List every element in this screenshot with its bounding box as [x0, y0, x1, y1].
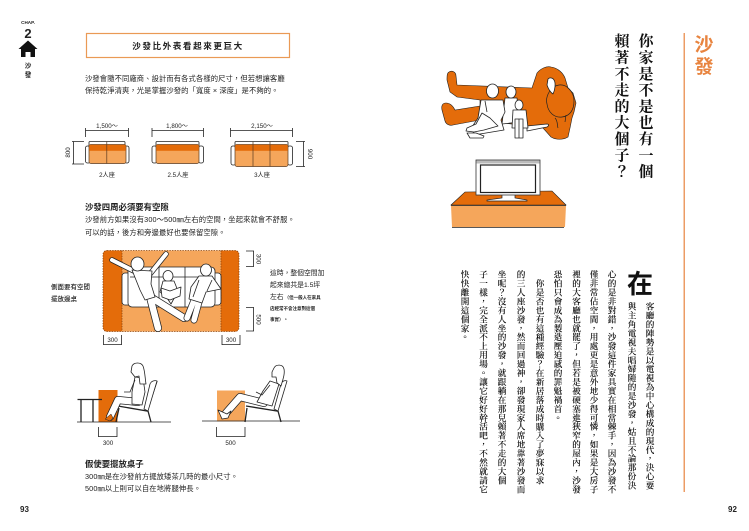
headline [612, 32, 656, 180]
intro text [85, 74, 285, 95]
figure: seated forward [110, 400, 138, 417]
section title: 發 [694, 56, 714, 78]
sofa: 2.5 seats: 1,800～ [166, 123, 188, 130]
dimension: 500 [216, 427, 245, 437]
sofa outline [122, 267, 221, 307]
chapter tab [18, 20, 38, 79]
cushion face [547, 78, 555, 94]
chapter tab: 2 [24, 26, 32, 41]
sofa: 2.5 seats [152, 123, 204, 179]
intro text: 保持乾淨清爽，光是掌握沙發的「寬度 × 深度」是不夠的。 [85, 86, 279, 95]
clearance text: 可以的話，後方和旁邊最好也要保留空隙。 [85, 228, 226, 237]
giant orange figure [442, 67, 576, 139]
dimension: 300 left: 300 [107, 337, 118, 344]
chapter tab: CHAP. [21, 20, 35, 25]
heading box: sofa looks bigger [86, 34, 290, 58]
section title: 沙 [694, 35, 714, 56]
table note: 500㎜以上則可以自在地將腿伸長。 [85, 484, 201, 493]
sofa: 2 seats: 1,500～ [96, 123, 118, 130]
body text: 坐呢？沒有人坐的沙發，就跟躺在那兒賴著不走的大個 [496, 269, 508, 485]
illustration: family on sofa [442, 67, 576, 228]
side table [78, 400, 102, 422]
total area note: 事實）。 [270, 316, 288, 323]
body text: 與主角電視夫唱婦隨的是沙發，姑且不論那份決 [626, 301, 638, 491]
page number 92: 92 [728, 505, 737, 514]
side view: 300 clearance: 300 [103, 440, 114, 447]
table note [85, 459, 238, 493]
sofa: 3 seats: 3人座 [254, 171, 270, 179]
cushion curves [547, 85, 574, 128]
total area note: 這時，整個空間加 [270, 268, 325, 277]
body text: 客廳的陣勢是以電視為中心構成的現代，決心要 [644, 301, 656, 491]
dimension: 800: 800 [65, 147, 72, 158]
total area note: 店經常不會注意到這個 [270, 305, 315, 312]
side table note: 側面要有空間 [51, 282, 90, 291]
body text: 你是否也有這種經驗？在新居落成時購入了夢寐以求 [534, 278, 546, 485]
section title [694, 35, 714, 78]
figure: legs stretched [226, 397, 264, 413]
body text: 僅非常佔空間，用處更是意外地少得可憐，如果是大房子 [588, 269, 600, 494]
figure: child reading [160, 270, 181, 304]
side table note: 擺放邊桌 [51, 294, 78, 303]
dimension: 300 right [222, 335, 240, 345]
chapter tab: 沙 [25, 62, 32, 70]
heading box: sofa looks bigger: 沙發比外表看起來更巨大 [132, 40, 244, 51]
chapter rule [684, 33, 685, 492]
clearance text: 沙發前方如果沒有300～500㎜左右的空間，坐起來就會不舒服。 [85, 215, 295, 224]
side table note [51, 282, 90, 303]
body text: 裡的大客廳也就罷了，但若是被硬塞進狹窄的屋內，沙發 [570, 269, 582, 494]
total area note: 左右（但一般人在家具 [270, 292, 321, 301]
body text: 的三人座沙發，然而回過神，卻發現家人席地靠著沙發而 [515, 269, 527, 494]
side view: 500 clearance [202, 365, 300, 447]
dimension: 500 front: 500 [254, 314, 262, 325]
tv [487, 193, 527, 201]
dimension: 900 [296, 142, 313, 166]
side view: 500 clearance: 500 [225, 440, 236, 447]
sofa: 2.5 seats: 2.5人座 [168, 171, 188, 179]
sofa: 2 seats: 2人座 [99, 171, 115, 179]
figure: sprawling adult [112, 254, 184, 328]
sofa sizes diagram [65, 123, 313, 179]
table note: 假使要擺放桌子 [85, 459, 144, 469]
drop cap: 在 [627, 269, 653, 299]
sofa: 3 seats [230, 123, 292, 179]
body text: 恐怕只會成為製造壓迫感的罪魁禍首。 [552, 270, 564, 422]
clearance text [85, 202, 295, 237]
dimension: 500 front [246, 308, 262, 331]
floor plan diagram [103, 250, 239, 332]
side view: 300 clearance [77, 363, 171, 447]
dimension: 300 left [104, 335, 122, 345]
sofa: 2 seats [86, 123, 129, 179]
body text [459, 269, 656, 494]
figure: seated adult [187, 264, 221, 320]
page number 93: 93 [20, 505, 29, 514]
sofa: 3 seats: 2,150～ [251, 123, 273, 130]
dimension: 300 right: 300 [226, 337, 237, 344]
total area note: 起來總共是1.5坪 [270, 280, 320, 289]
dimension: 300 back: 300 [254, 254, 262, 265]
intro text: 沙發會隨不同廠商、設計而有各式各樣的尺寸，但若想讓客廳 [85, 74, 285, 83]
body text: 心的是非對錯，沙發這件家具實在相當棘手，因為沙發不 [606, 269, 618, 494]
chair [116, 381, 157, 422]
body text: 子一樣，完全派不上用場。讓它好好幹活吧，不然就請它 [478, 270, 490, 494]
dimension: 800 [65, 142, 84, 164]
dimension: 300 [98, 427, 117, 437]
table note: 300㎜是在沙發前方擺放矮茶几時的最小尺寸。 [85, 472, 238, 481]
body text: 快快離開這個家。 [459, 269, 471, 342]
family line art [466, 84, 548, 138]
chair [245, 381, 286, 422]
total area note [270, 268, 325, 323]
dimension: 900: 900 [306, 149, 313, 160]
clearance text: 沙發四周必須要有空隙 [85, 202, 169, 212]
headline: 你家是不是也有一個 [636, 32, 656, 180]
headline: 賴著不走的大個子？ [612, 33, 632, 180]
chapter tab: 發 [25, 70, 32, 79]
icon: house [18, 40, 38, 57]
dimension: 300 back [246, 251, 262, 266]
tv cabinet [451, 191, 566, 205]
